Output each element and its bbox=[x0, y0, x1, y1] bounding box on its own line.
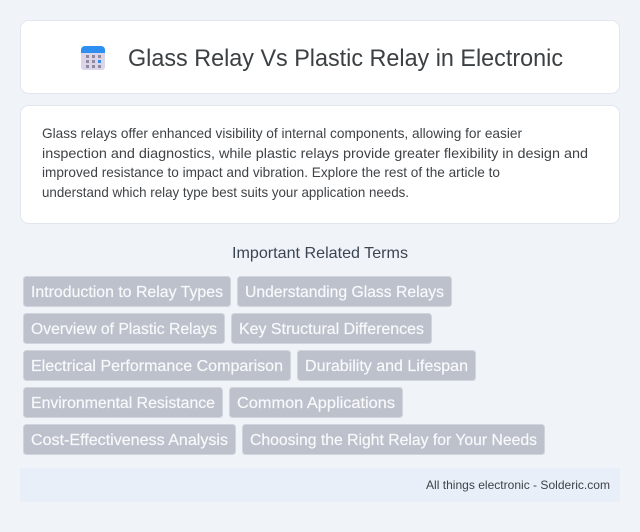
chip: Durability and Lifespan bbox=[298, 350, 476, 380]
panel: description: inspection and diagnostics, while plastic relays provide greater flexibility in design and bbox=[42, 145, 588, 161]
title: Glass Relay Vs Plastic Relay in Electronic bbox=[128, 45, 563, 72]
chip: Electrical Performance Comparison bbox=[24, 350, 290, 380]
chip: Overview of Plastic Relays: Overview of Plastic Relays bbox=[31, 321, 217, 338]
chip: Introduction to Relay Types bbox=[24, 276, 230, 306]
chip: Durability and Lifespan: Durability and Lifespan bbox=[305, 358, 468, 375]
chip: Key Structural Differences: Key Structural Differences bbox=[239, 321, 424, 338]
heading: related terms: Important Related Terms bbox=[232, 245, 408, 262]
term chips bbox=[24, 276, 544, 454]
chip: Environmental Resistance: Environmental Resistance bbox=[31, 395, 215, 412]
chip: Key Structural Differences bbox=[232, 314, 432, 344]
panel: description: Glass relays offer enhanced visibility of internal components, allowing for easier bbox=[42, 125, 522, 141]
header panel bbox=[20, 20, 620, 94]
chip: Electrical Performance Comparison: Electrical Performance Comparison bbox=[31, 358, 283, 375]
icon: calendar bbox=[81, 46, 105, 70]
panel: description: understand which relay type best suits your application needs. bbox=[42, 184, 409, 200]
chip: Cost-Effectiveness Analysis: Cost-Effectiveness Analysis bbox=[31, 432, 228, 449]
chip: Cost-Effectiveness Analysis bbox=[24, 424, 236, 454]
chip: Overview of Plastic Relays bbox=[24, 314, 224, 344]
panel: description: improved resistance to impact and vibration. Explore the rest of the article to bbox=[42, 164, 500, 180]
chip: Common Applications: Common Applications bbox=[237, 395, 395, 412]
chip: Environmental Resistance bbox=[24, 388, 222, 418]
footer bbox=[20, 468, 620, 502]
chip: Common Applications bbox=[230, 388, 402, 418]
chip: Understanding Glass Relays: Understanding Glass Relays bbox=[245, 284, 444, 301]
footer: All things electronic - Solderic.com bbox=[426, 478, 610, 492]
chip: Introduction to Relay Types: Introduction to Relay Types bbox=[31, 284, 223, 301]
chip: Choosing the Right Relay for Your Needs bbox=[242, 424, 544, 454]
panel: description bbox=[20, 106, 620, 224]
chip: Choosing the Right Relay for Your Needs: Choosing the Right Relay for Your Needs bbox=[250, 432, 537, 449]
chip: Understanding Glass Relays bbox=[238, 276, 452, 306]
